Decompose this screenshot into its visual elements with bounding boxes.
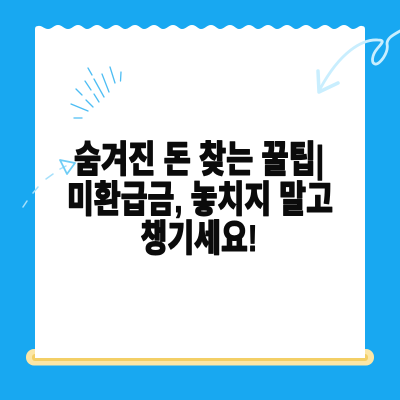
title: 숨겨진 돈 찾는 꿀팁| (74, 139, 324, 181)
title (67, 139, 333, 259)
arrow: curly light blue arrow top right (318, 31, 400, 92)
title: 미환급금, 놓치지 말고 (67, 179, 333, 220)
icon: sunburst dashes (71, 67, 121, 118)
icon: paper plane (60, 160, 75, 174)
arrow: dashed paper plane path (23, 160, 75, 207)
title: 챙기세요! (140, 218, 258, 259)
white paper card with scalloped top (35, 25, 365, 358)
yellow paper holder bar (26, 349, 374, 366)
